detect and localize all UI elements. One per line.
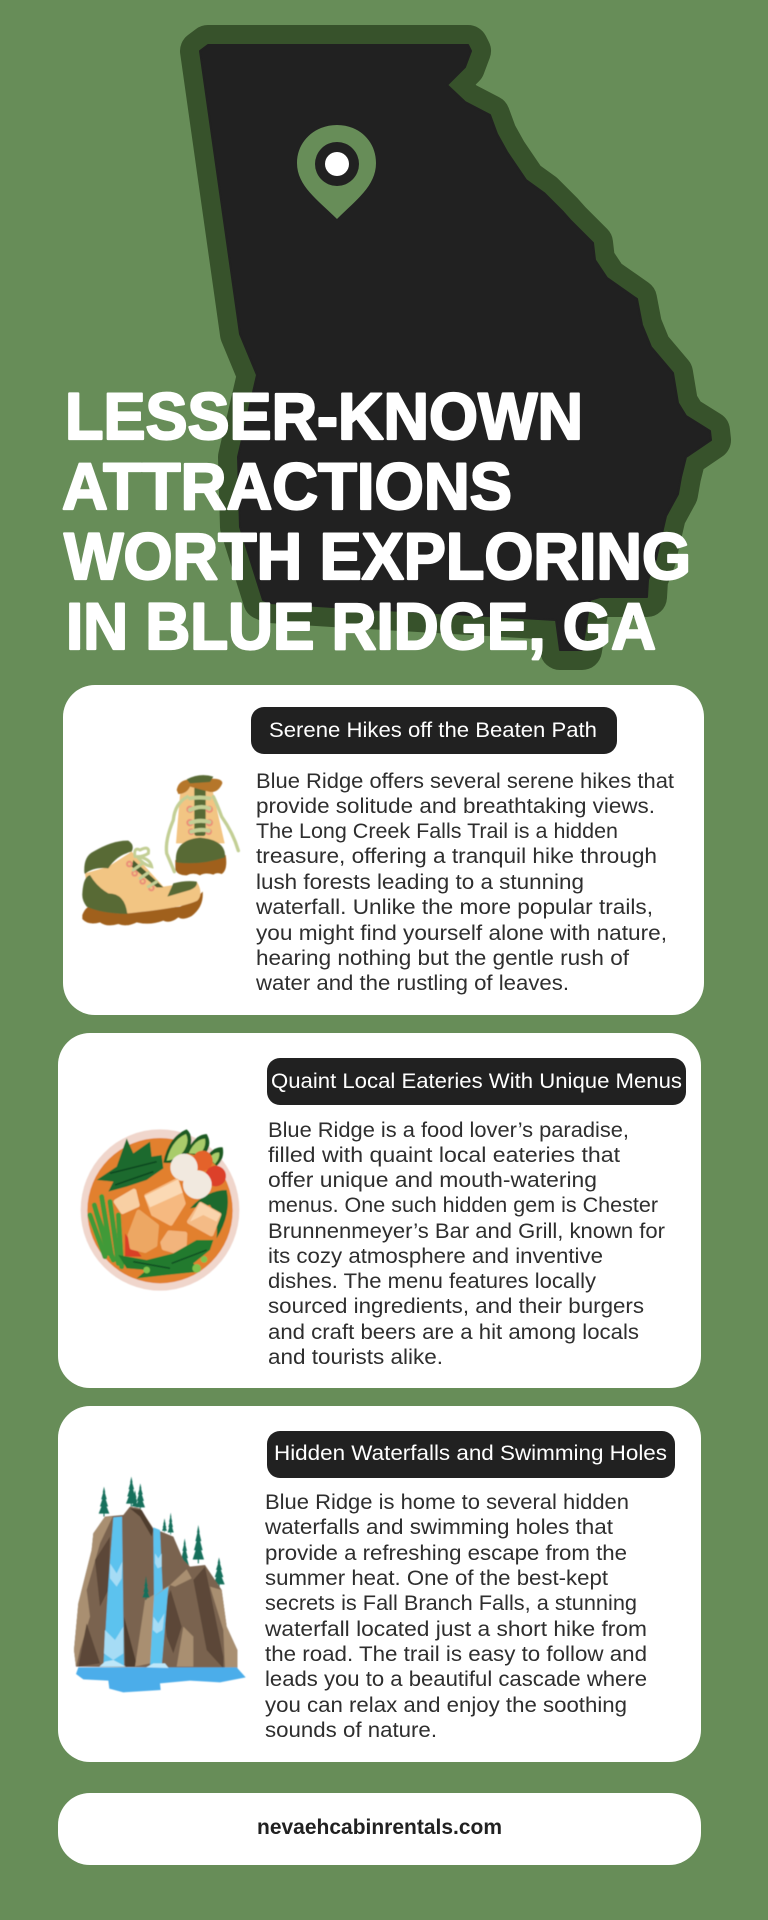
footer website bar: nevaehcabinrentals.com xyxy=(257,1816,502,1839)
heading pill: waterfalls: Hidden Waterfalls and Swimming Holes xyxy=(274,1442,667,1465)
text block: hikes: provide solitude and breathtaking views. xyxy=(256,795,655,818)
title: WORTH EXPLORING xyxy=(64,519,691,593)
text block: eateries xyxy=(268,1119,665,1369)
text block: hikes: water and the rustling of leaves. xyxy=(255,972,569,995)
text block: eateries: Brunnenmeyer’s Bar and Grill, known for xyxy=(268,1220,665,1243)
title: IN BLUE RIDGE, GA xyxy=(66,589,656,663)
text block: hikes: lush forests leading to a stunning xyxy=(256,871,584,894)
text block: waterfalls: leads you to a beautiful cascade where xyxy=(265,1668,647,1691)
panel: local eateries xyxy=(58,1033,701,1388)
icon: hiking boots xyxy=(82,775,238,925)
heading pill: eateries xyxy=(267,1058,686,1105)
text block: eateries: filled with quaint local eateries that xyxy=(268,1144,620,1167)
text block: hikes: treasure, offering a tranquil hike through xyxy=(256,845,657,868)
text block: waterfalls: the road. The trail is easy to follow and xyxy=(265,1643,647,1666)
text block: waterfalls: sounds of nature. xyxy=(265,1719,437,1742)
title xyxy=(62,379,691,663)
title: ATTRACTIONS xyxy=(62,449,512,523)
text block: hikes: hearing nothing but the gentle rush of xyxy=(256,947,629,970)
panel: serene hikes xyxy=(63,685,704,1015)
heading pill: hikes: Serene Hikes off the Beaten Path xyxy=(269,719,597,742)
text block: eateries: sourced ingredients, and their burgers xyxy=(268,1295,644,1318)
text block: hikes: Blue Ridge offers several serene hikes that xyxy=(256,770,674,793)
text block: waterfalls: Blue Ridge is home to several hidden xyxy=(265,1491,629,1514)
text block: hikes: The Long Creek Falls Trail is a hidden xyxy=(256,820,618,843)
text block: eateries: offer unique and mouth-watering xyxy=(268,1169,597,1192)
text block: waterfalls: you can relax and enjoy the soothing xyxy=(265,1694,627,1717)
icon: location pin xyxy=(297,125,376,219)
text block: waterfalls: provide a refreshing escape from the xyxy=(265,1542,627,1565)
heading pill: hikes xyxy=(251,707,617,754)
footer website bar xyxy=(58,1793,701,1865)
text block: eateries: and craft beers are a hit among locals xyxy=(268,1321,639,1344)
text block: waterfalls: waterfall located just a short hike from xyxy=(264,1618,647,1641)
text block: waterfalls: summer heat. One of the best-kept xyxy=(265,1567,608,1590)
text block: hikes xyxy=(255,770,674,995)
text block: eateries: dishes. The menu features locally xyxy=(268,1270,597,1293)
panel: waterfalls xyxy=(58,1406,701,1762)
text block: hikes: you might find yourself alone with nature, xyxy=(256,922,667,945)
heading pill: eateries: Quaint Local Eateries With Unique Menus xyxy=(271,1070,682,1093)
text block: waterfalls xyxy=(264,1491,647,1742)
text block: eateries: its cozy atmosphere and inventive xyxy=(268,1245,603,1268)
icon: waterfall xyxy=(74,1477,246,1692)
text block: waterfalls: waterfalls and swimming holes that xyxy=(264,1516,613,1539)
text block: hikes: waterfall. Unlike the more popular trails, xyxy=(255,896,653,919)
text block: eateries: Blue Ridge is a food lover’s paradise, xyxy=(268,1119,629,1142)
text block: eateries: menus. One such hidden gem is Chester xyxy=(268,1194,658,1217)
text block: waterfalls: secrets is Fall Branch Falls, a stunning xyxy=(265,1592,637,1615)
map of Georgia xyxy=(200,45,711,650)
title: LESSER-KNOWN xyxy=(65,379,583,453)
text block: eateries: and tourists alike. xyxy=(268,1346,443,1369)
heading pill: waterfalls xyxy=(267,1431,675,1478)
icon: food bowl xyxy=(81,1129,239,1291)
